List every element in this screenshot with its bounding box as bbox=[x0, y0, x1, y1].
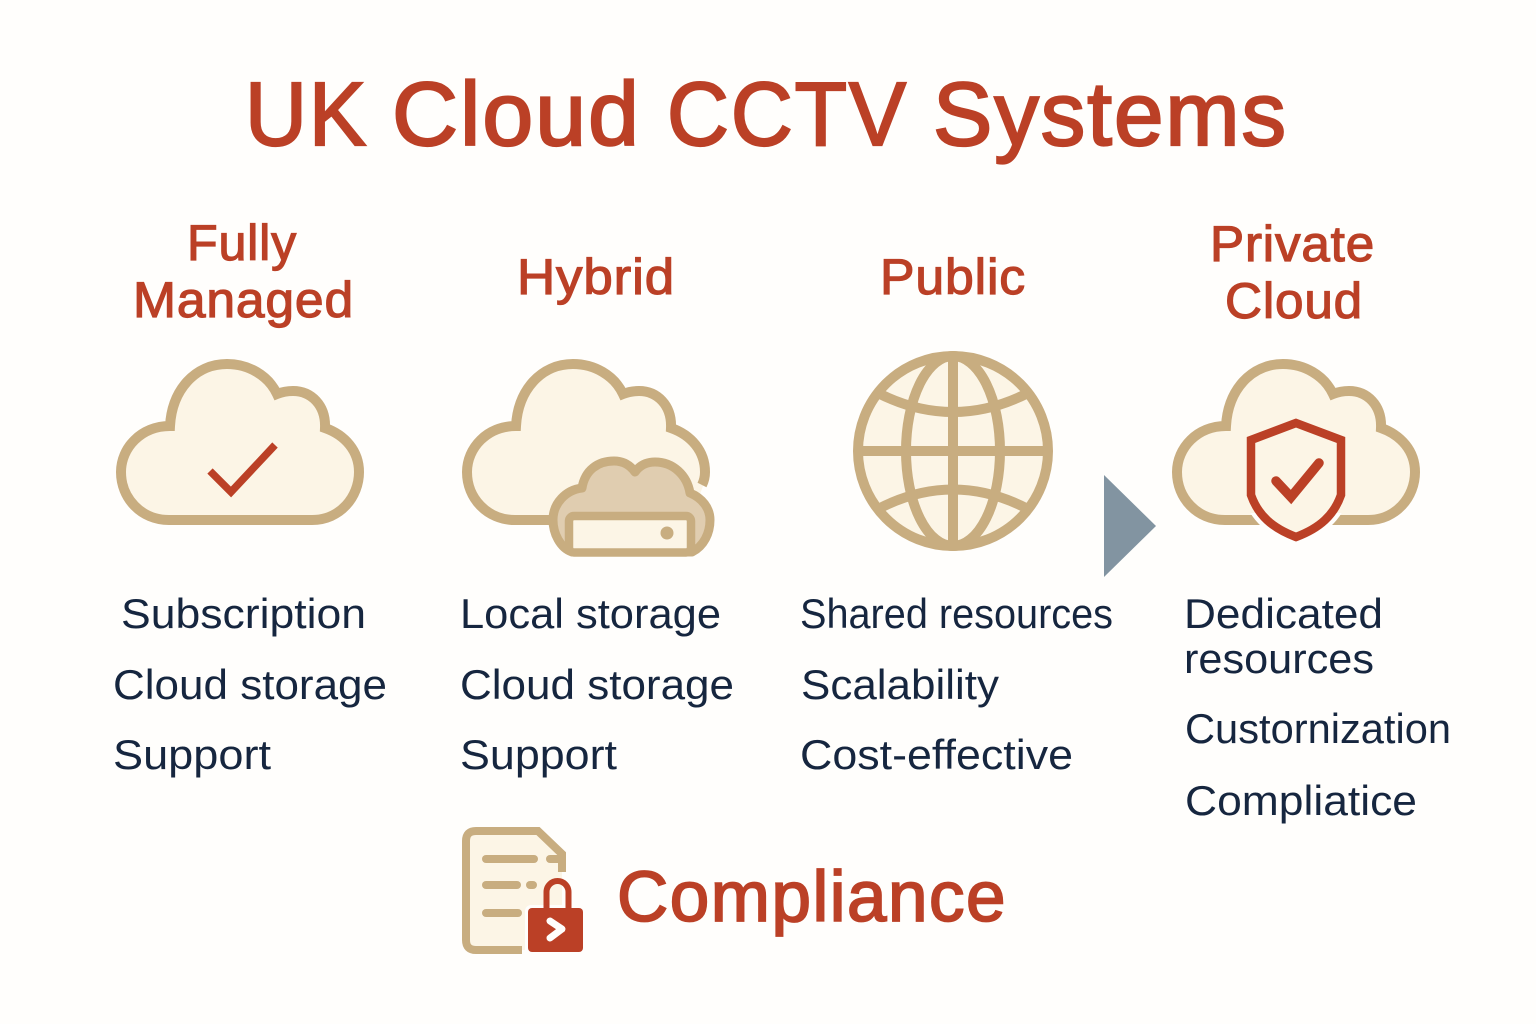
feature list: fully managed: Support bbox=[113, 731, 271, 778]
panel: fully managed bbox=[113, 215, 387, 778]
feature list: hybrid: Support bbox=[460, 731, 617, 778]
title bbox=[245, 65, 1288, 165]
feature list: fully managed: Subscription bbox=[121, 590, 366, 637]
feature list: hybrid bbox=[460, 590, 734, 778]
heading: private cloud bbox=[1210, 216, 1375, 329]
arrow: towards private cloud bbox=[1104, 475, 1156, 577]
icon: cloud with check mark bbox=[121, 364, 359, 520]
panel: hybrid bbox=[460, 249, 734, 778]
panel: public bbox=[800, 249, 1113, 778]
icon: document with padlock bbox=[466, 831, 586, 955]
feature list: private cloud bbox=[1184, 590, 1451, 824]
heading: private cloud: Private bbox=[1210, 216, 1375, 272]
feature list: private cloud: resources bbox=[1184, 635, 1374, 682]
icon: cloud with shield bbox=[1177, 364, 1415, 537]
heading: fully managed: Managed bbox=[133, 272, 354, 328]
icon: globe bbox=[858, 356, 1048, 546]
feature list: hybrid: Local storage bbox=[460, 590, 721, 637]
heading: compliance: Compliance bbox=[617, 858, 1007, 937]
heading: hybrid: Hybrid bbox=[517, 249, 675, 305]
feature list: hybrid: Cloud storage bbox=[460, 661, 734, 708]
feature list: fully managed: Cloud storage bbox=[113, 661, 387, 708]
feature list: public: Shared resources bbox=[800, 590, 1113, 637]
feature list: public: Scalability bbox=[801, 661, 999, 708]
icon: cloud with local storage bbox=[467, 364, 710, 552]
feature list: private cloud: Custornization bbox=[1185, 705, 1451, 752]
feature list: public bbox=[800, 590, 1113, 778]
feature list: fully managed bbox=[113, 590, 387, 778]
title: UK bbox=[245, 65, 368, 165]
feature list: private cloud: Dedicated bbox=[1184, 590, 1383, 637]
feature list: private cloud: Compliatice bbox=[1185, 777, 1417, 824]
title: Cloud bbox=[392, 65, 641, 165]
title: CCTV bbox=[667, 65, 908, 165]
feature list: public: Cost-effective bbox=[800, 731, 1073, 778]
heading: public: Public bbox=[880, 249, 1026, 305]
panel: private cloud bbox=[1177, 216, 1451, 824]
compliance section bbox=[466, 831, 1007, 955]
heading: fully managed: Fully bbox=[187, 215, 297, 271]
heading: private cloud: Cloud bbox=[1225, 273, 1363, 329]
heading: fully managed bbox=[133, 215, 354, 328]
title: Systems bbox=[933, 65, 1288, 165]
